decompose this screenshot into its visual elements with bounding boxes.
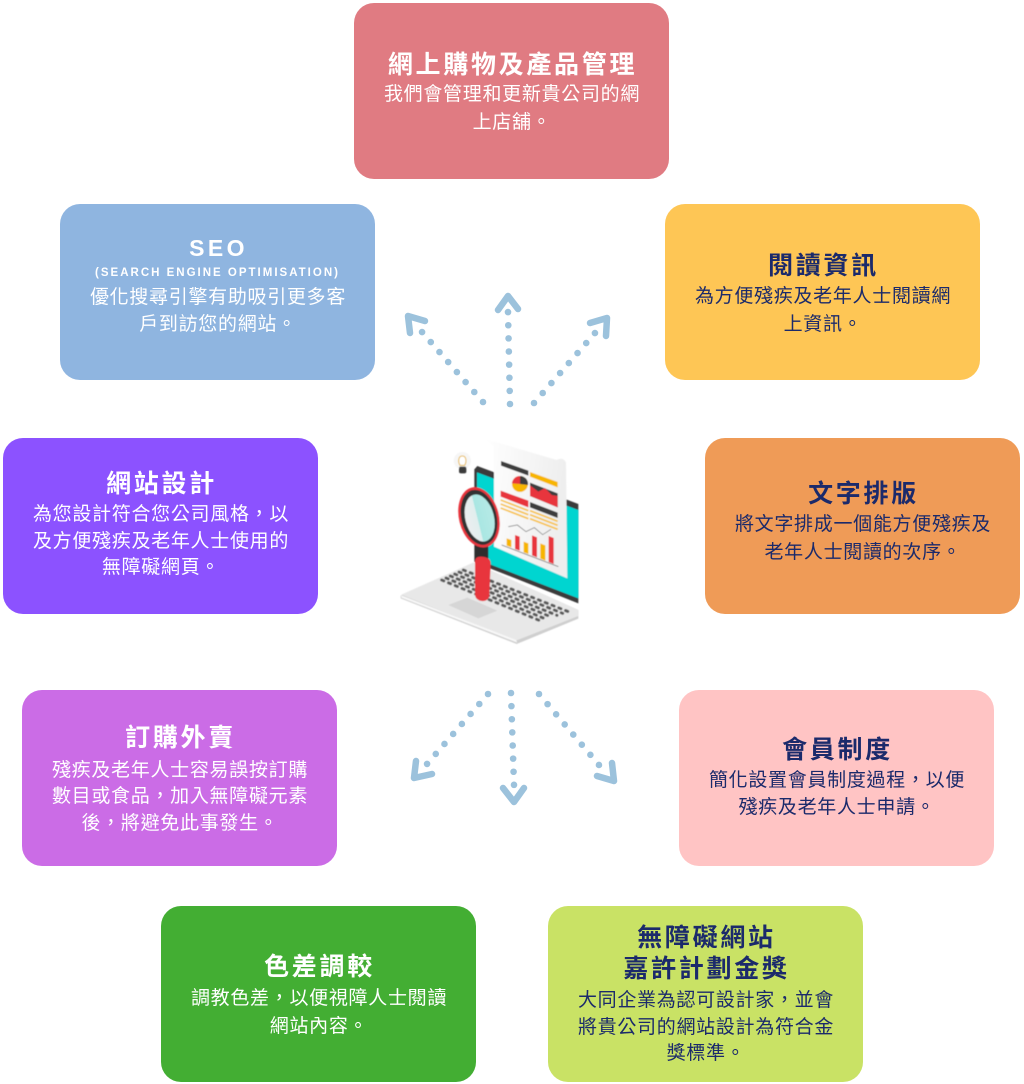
text: award description line 3: 獎標準。	[667, 1043, 745, 1064]
text: web design description line 2: 及方便殘疾及老年人士使用的	[33, 531, 289, 552]
heading: membership: 會員制度	[782, 736, 893, 764]
panel: takeaway ordering	[22, 690, 337, 866]
heading: colour contrast: 色差調較	[264, 953, 375, 981]
arrow: up left	[408, 316, 483, 402]
subheading: search engine optimisation: (SEARCH ENGINE OPTIMISATION)	[95, 267, 340, 279]
text: typography description: 將文字排成一個能方便殘疾及	[735, 514, 991, 535]
text: web design description line 3: 無障礙網頁。	[102, 557, 220, 578]
heading: award line 2: 嘉許計劃金獎	[623, 955, 790, 983]
laptop base	[401, 563, 578, 644]
report paper	[483, 438, 567, 578]
heading: web design: 網站設計	[106, 470, 217, 498]
panel: SEO	[60, 204, 375, 380]
heading: typography: 文字排版	[808, 480, 919, 508]
text: SEO description: 優化搜尋引擎有助吸引更多客	[90, 287, 346, 308]
text: online shopping description line 2: 上店舖。	[473, 112, 551, 133]
panel: accessibility award	[548, 906, 863, 1082]
text: SEO description line 2: 戶到訪您的網站。	[139, 314, 297, 335]
arrow: up right	[534, 318, 607, 403]
text: membership description: 簡化設置會員制度過程，以便	[709, 770, 965, 791]
panel: online shopping	[354, 3, 669, 179]
text: online shopping description: 我們會管理和更新貴公司的網	[384, 84, 640, 105]
text: reading description: 為方便殘疾及老年人士閱讀網	[695, 286, 951, 307]
laptop screen	[474, 466, 578, 603]
heading: reading information: 閱讀資訊	[768, 252, 879, 280]
panel: web design	[3, 438, 318, 614]
text: reading description line 2: 上資訊。	[784, 314, 862, 335]
heading: online shopping: 網上購物及產品管理	[388, 51, 637, 79]
text: takeaway description: 殘疾及老年人士容易誤按訂購	[52, 760, 308, 781]
text: award description: 大同企業為認可設計家，並會	[578, 990, 834, 1011]
magnifying glass	[452, 483, 506, 601]
illustration: laptop with report and magnifier	[400, 452, 580, 644]
text: typography description line 2: 老年人士閱讀的次序。	[764, 542, 962, 563]
panel: typography	[705, 438, 1020, 614]
panel: membership	[679, 690, 994, 866]
keyboard	[442, 570, 568, 621]
text: takeaway description line 2: 數目或食品，加入無障礙元素	[52, 786, 308, 807]
panel: colour contrast	[161, 906, 476, 1082]
text: membership description line 2: 殘疾及老年人士申請。	[738, 797, 936, 818]
heading: takeaway ordering: 訂購外賣	[125, 724, 236, 752]
icon: light bulb	[454, 452, 471, 473]
heading: award line 1: 無障礙網站	[637, 924, 776, 952]
arrow: down right	[539, 694, 614, 781]
text: web design description: 為您設計符合您公司風格，以	[33, 504, 289, 525]
text: takeaway description line 3: 後，將避免此事發生。	[81, 813, 278, 834]
arrow: down left	[414, 694, 488, 778]
arrow: up	[498, 296, 518, 404]
text: colour contrast description: 調教色差，以便視障人士閱讀	[191, 988, 447, 1009]
panel: reading information	[665, 204, 980, 380]
heading: SEO: SEO	[189, 235, 248, 261]
text: award description line 2: 將貴公司的網站設計為符合金	[578, 1017, 834, 1038]
arrow: down	[503, 693, 524, 802]
text: colour contrast description line 2: 網站內容。	[270, 1016, 368, 1037]
